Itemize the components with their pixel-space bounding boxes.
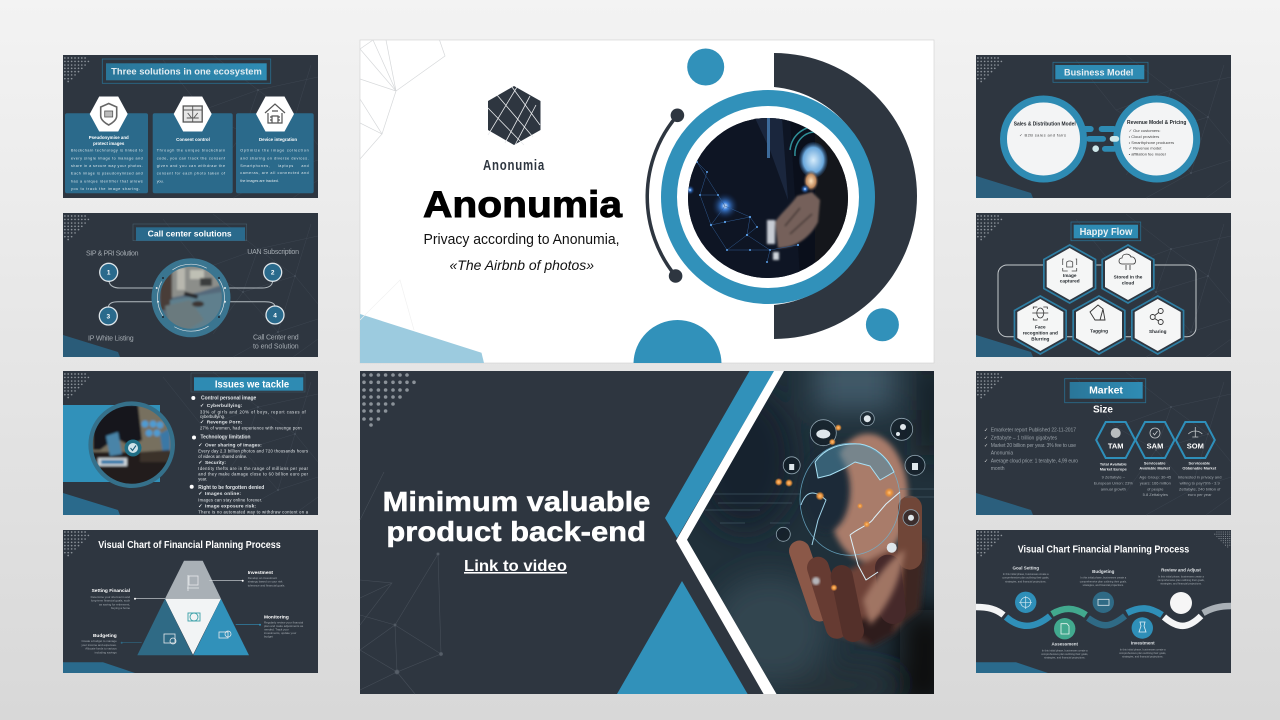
heading: three solutions <box>102 59 271 83</box>
text: card one body: Blockchain technology is linked to <box>71 149 143 153</box>
node: revenue model: ✓ Revenue model: <box>1129 145 1162 150</box>
text: card two body: Through the unique blockchain <box>157 149 225 153</box>
text: TAM description: Total Available <box>1100 461 1128 466</box>
title: minimum valuable product: Minimum valuable <box>383 486 650 517</box>
title: minimum valuable product <box>383 486 650 547</box>
text: issue list: and they make damage close to 60 billion euro per <box>198 471 309 476</box>
text: issue list: Right to be forgotten denied <box>198 485 264 491</box>
text: SAM description: Available Market <box>1139 465 1171 470</box>
decoration: blue triangle <box>617 581 748 694</box>
hexagon: tagging: Tagging <box>1090 329 1108 334</box>
decoration: network lines <box>360 472 443 694</box>
text: issue list <box>190 396 309 515</box>
text: market facts: ✓ <box>984 458 988 464</box>
text: SOM description: willing to pay79% - 3.9 <box>1180 480 1220 485</box>
panel: happy flow <box>976 213 1231 357</box>
number badges: 4 <box>273 312 277 319</box>
node: sales and distribution: ✓ B2B sales and fairs <box>1019 133 1066 138</box>
node: revenue model: Revenue Model & Pricing <box>1127 120 1186 126</box>
hexagon: stored in the cloud: cloud <box>1122 280 1134 285</box>
text: SOM description: Zettabyte, 240 billion of <box>1179 486 1221 491</box>
text: card two body: consent for each photo taken of <box>157 172 226 176</box>
connectors <box>108 281 275 307</box>
text: TAM description: European Union: 23% <box>1094 480 1133 485</box>
decoration: circles <box>634 48 899 363</box>
heading: issues <box>191 373 305 392</box>
hexagon: face recognition: recognition and <box>1023 330 1058 335</box>
text: issue list: ✓ <box>198 442 202 448</box>
heading: business model: Business Model <box>1064 68 1133 78</box>
node: revenue model: • Cloud providers <box>1129 134 1159 139</box>
node: revenue model: ✓ Our customers: <box>1129 128 1161 133</box>
text: card two body <box>157 149 226 183</box>
card: pseudonymise <box>65 96 148 193</box>
text: market facts: ✓ <box>984 435 988 441</box>
title: Visual Chart of Financial Planning Process <box>98 540 281 551</box>
heading: issues: Issues we tackle <box>215 380 290 390</box>
step: assessment: In this initial phase, businesses create a <box>1042 648 1088 652</box>
callout: budgeting: Budgeting <box>93 633 117 639</box>
hexagon: image captured: captured <box>1060 279 1080 284</box>
card: consent control: Consent control <box>176 137 210 142</box>
hexagon: sharing: Sharing <box>1149 329 1167 334</box>
text: SAM description: 5.8 Zettabytes <box>1143 492 1168 497</box>
text: issue list: ✓ <box>200 403 204 409</box>
panel: visual chart of financial planning <box>63 530 318 673</box>
labels <box>86 249 299 350</box>
text: issue list: There is no automated way to withdraw content on a <box>198 510 309 515</box>
icon: device house <box>256 96 294 132</box>
icon: consent grid <box>174 96 212 132</box>
hexagon: face recognition: Face <box>1035 325 1046 330</box>
step: budgeting: strategies, and financial projections. <box>1083 583 1124 587</box>
decoration: blue chevron bar <box>665 371 774 538</box>
callout: budgeting <box>81 633 142 654</box>
text: TAM description: Market Europe <box>1100 467 1128 472</box>
node: sales and distribution <box>1004 99 1084 179</box>
panel: title slide Anonumia <box>360 40 934 364</box>
text: card one body: share in a secure way your photos. <box>71 164 143 168</box>
callout: setting financial: Determine your short-term and <box>91 595 130 599</box>
heading: market <box>1065 379 1146 403</box>
hexagon: TAM <box>1096 422 1135 458</box>
step: assessment: Assessment <box>1051 642 1078 647</box>
step: review and adjust <box>1157 568 1205 614</box>
text: card three body: cameras, are all connected and <box>240 171 309 175</box>
icon: shield hexagon <box>90 96 128 132</box>
step: investment: Investment <box>1131 641 1155 646</box>
panel: three solutions <box>63 55 318 198</box>
text: SAM description: of people <box>1147 486 1164 491</box>
panel: call center solutions <box>63 213 318 357</box>
heading: call center <box>133 224 247 241</box>
text: SOM description: Interested in privacy and <box>1178 475 1221 480</box>
decoration: white chevron <box>676 371 784 694</box>
heading: three solutions: Three solutions in one ecosystem <box>111 67 262 78</box>
node: revenue model: • affiliation fee model <box>1129 151 1166 156</box>
text: issue list: year. <box>198 477 207 482</box>
step: assessment: comprehensive plan outlining their goals, <box>1041 652 1088 656</box>
number badges: 2 <box>271 270 275 277</box>
callout: budgeting: your income and expenses. <box>81 643 117 647</box>
text: card three body: the images are tracked. <box>240 179 279 183</box>
text: card three body <box>240 149 309 183</box>
text: SAM description: Age Group: 30-45 <box>1139 475 1172 480</box>
text: issue list: cyberbullying. <box>200 414 225 419</box>
text: card two body: given and you can withdraw the <box>157 164 225 168</box>
subtitle: Privacy according to Anonumia, <box>424 231 620 248</box>
heading: happy flow <box>1071 222 1141 241</box>
hexagon: tagging <box>1072 295 1126 355</box>
text: SAM description: Serviceable <box>1144 461 1166 466</box>
photo: hand holding globe <box>687 371 934 694</box>
text: issue list: ✓ <box>200 420 204 426</box>
callout: setting financial: as saving for retirement, <box>99 602 130 606</box>
text: issue list: Images can stay online forever. <box>198 497 262 502</box>
heading: market: Market <box>1089 385 1123 397</box>
text: issue list: ✓ <box>198 460 202 466</box>
title: minimum valuable product: product back-end <box>386 516 646 547</box>
callout: budgeting: Create a budget to manage <box>81 639 117 643</box>
step: budgeting: Budgeting <box>1092 569 1115 574</box>
decoration: blue ring <box>669 98 867 296</box>
number badges: 1 <box>107 270 111 277</box>
number badges <box>99 263 284 325</box>
text: TAM description: annual growth <box>1101 486 1126 491</box>
callout: monitoring: plan and make adjustments as <box>264 624 304 628</box>
heading: business model <box>1053 62 1148 82</box>
step: goal setting: In this initial phase, businesses create a <box>1003 572 1049 576</box>
text: market facts <box>984 427 1078 472</box>
callout: monitoring: needed. Track your <box>264 627 289 631</box>
step: goal setting: Goal Setting <box>1012 565 1039 570</box>
text: card one body: every single image to manage and <box>71 156 143 160</box>
callout: setting financial: long-term financial goals, such <box>91 599 130 603</box>
text: issue list: Image exposure risk: <box>205 503 256 509</box>
text: issue list: Security: <box>205 460 226 466</box>
text: market facts: Average cloud price: 1 terabyte, 4,99 euro <box>991 458 1078 464</box>
text: market facts: Zettabyte – 1 trillion gigabytes <box>991 435 1058 441</box>
callout: investment: Investment <box>248 570 273 576</box>
text: issue list: ✓ <box>198 503 202 509</box>
text: issue list: Every day 2.3 billion photos and 720 thousands hours <box>198 448 308 453</box>
hexagon: SAM <box>1136 422 1174 458</box>
card: device integration <box>236 96 314 193</box>
hexagon: SOM: SOM <box>1187 441 1204 450</box>
logo: hexagon <box>488 86 540 145</box>
text: issue list: Technology limitation <box>200 435 250 441</box>
step: investment <box>1119 617 1166 659</box>
hexagon: SOM <box>1176 422 1215 458</box>
text: issue list: Identity thefts are in the range of millions per year <box>198 466 309 471</box>
node: revenue model <box>1117 99 1197 179</box>
card: consent control <box>153 96 233 193</box>
callout: monitoring: investments, update your <box>264 631 296 635</box>
callout: monitoring: Monitoring <box>264 614 289 620</box>
hexagon: stored in the cloud: Stored in the <box>1114 274 1143 279</box>
hexagon: SAM: SAM <box>1147 441 1163 450</box>
text: issue list: ✓ <box>198 491 202 497</box>
hexagon: face recognition: Blurring <box>1031 336 1050 341</box>
text: market facts: Anonumia <box>991 451 1013 457</box>
step: assessment <box>1041 618 1088 660</box>
callout: investment: strategy based on your risk <box>248 580 283 584</box>
step: budgeting: comprehensive plan outlining their goals, <box>1080 579 1127 583</box>
number badges: 3 <box>106 313 110 320</box>
hexagon: TAM: TAM <box>1108 441 1124 450</box>
step: investment: strategies, and financial projections. <box>1122 655 1164 659</box>
text: card two body: you. <box>157 179 164 183</box>
photo circle: tablet <box>88 401 175 488</box>
callout: budgeting: Allocate funds to various <box>85 647 117 651</box>
text: card one body: has a unique identifier that allows <box>71 179 143 183</box>
subheading: size: Size <box>1093 405 1113 416</box>
photo circle: office <box>152 258 230 337</box>
callout: budgeting: including savings <box>95 650 117 654</box>
step: budgeting <box>1080 569 1127 613</box>
text: SAM description <box>1139 461 1172 497</box>
text: issue list: Revenge Porn: <box>207 420 243 426</box>
text: issue list: Images online: <box>205 491 241 497</box>
hexagon: sharing <box>1131 295 1184 355</box>
text: TAM description: 9 Zettabyte – <box>1102 475 1126 480</box>
labels: IP White Listing <box>88 336 134 343</box>
hexagon: face recognition <box>1014 295 1067 355</box>
text: market facts: ✓ <box>984 427 988 433</box>
text: card three body: and sharing on diverse devices. <box>240 156 309 160</box>
photo: businessman with light bulb <box>685 118 848 278</box>
logo wordmark: Anonumia <box>483 158 545 174</box>
panel: market size <box>976 371 1231 515</box>
text: market facts: ✓ <box>984 443 988 449</box>
title: Visual Chart Financial Planning Process <box>1018 545 1189 556</box>
card: device integration: Device integration <box>259 137 297 142</box>
step: goal setting: strategies, and financial projections. <box>1005 579 1047 583</box>
text: card one body: you to track the image sharing. <box>71 187 140 191</box>
step: budgeting: In this initial phase, businesses create a <box>1080 576 1127 580</box>
callout: investment <box>209 570 285 588</box>
step: goal setting <box>1002 565 1049 613</box>
callout: investment: Develop an investment <box>248 576 277 580</box>
hexagon: stored in the cloud <box>1101 244 1155 304</box>
text: issue list: of videos an shared online. <box>198 454 247 459</box>
callout: investment: tolerance and financial goals. <box>248 584 285 588</box>
text: card two body: code, you can track the consent <box>157 156 225 160</box>
heading: happy flow: Happy Flow <box>1080 227 1133 238</box>
text: issue list: Over sharing of images: <box>205 442 262 448</box>
text: market facts: Market 20 billion per year. 3% fee to use <box>991 443 1076 449</box>
chart: triangle segments <box>137 561 249 655</box>
connectors: pills <box>1082 126 1119 152</box>
text: card three body: Optimize the image collection <box>240 149 309 153</box>
node: revenue model: • Smarthphone producers <box>1129 140 1174 145</box>
text: SOM description: Serviceable <box>1188 461 1211 466</box>
callout: monitoring: Regularly review your financial <box>264 620 304 624</box>
panel: financial planning wave <box>976 530 1231 673</box>
chart: wave ribbon <box>976 606 1231 626</box>
labels: to end Solution <box>253 343 299 350</box>
step: review and adjust: strategies, and financial projections. <box>1160 582 1202 586</box>
text: SOM description <box>1178 461 1221 497</box>
decoration: dark half ring <box>774 53 917 339</box>
step: assessment: strategies, and financial projections. <box>1044 656 1086 660</box>
text: SOM description: euro per year <box>1188 492 1212 497</box>
panel: business model <box>976 55 1231 198</box>
step: review and adjust: comprehensive plan outlining their goals, <box>1157 578 1205 582</box>
title: Anonumia: Anonumia <box>423 184 622 225</box>
hexagon: image captured: Image <box>1063 273 1077 278</box>
link to video: Link to video <box>464 558 567 575</box>
text: TAM description <box>1094 461 1133 491</box>
text: SAM description: years: 166 million <box>1140 480 1171 485</box>
callout: monitoring <box>236 614 304 639</box>
panel: issues we tackle <box>63 371 318 515</box>
hexagon: image captured <box>1043 244 1096 304</box>
panel: minimum valuable product <box>360 371 934 694</box>
step: investment: comprehensive plan outlining their goals, <box>1119 651 1166 655</box>
node: sales and distribution: Sales & Distribution Model <box>1014 122 1076 128</box>
text: SOM description: Obtainable Market <box>1182 466 1217 471</box>
card: pseudonymise: Pseudonymise and <box>89 135 129 140</box>
text: issue list: Cyberbullying: <box>207 403 243 409</box>
labels: SIP & PRI Solution <box>86 250 139 257</box>
text: card three body: Smartphones, laptops and <box>240 164 309 168</box>
callout: setting financial: Setting Financial <box>92 588 130 594</box>
text: card one body: Each image is pseudonymised and <box>71 172 143 176</box>
step: review and adjust: Review and Adjust <box>1161 568 1201 573</box>
callout: setting financial <box>91 588 165 610</box>
decoration: left arc with dots <box>647 108 684 283</box>
step: review and adjust: In this initial phase, businesses create a <box>1158 574 1204 578</box>
text: market facts: month <box>991 466 1005 472</box>
callout: setting financial: buying a home <box>111 606 130 610</box>
tagline: «The Airbnb of photos» <box>450 257 594 273</box>
labels: Call Center end <box>253 334 299 341</box>
text: issue list: Control personal image <box>201 396 256 402</box>
labels: UAN Subscription <box>247 249 299 256</box>
text: card one body <box>71 149 143 191</box>
card: pseudonymise: protect images <box>93 141 125 146</box>
text: issue list: 33% of girls and 20% of boys, report cases of <box>200 409 307 414</box>
text: issue list: 27% of women, had experience with revenge porn <box>200 425 302 430</box>
step: investment: In this initial phase, businesses create a <box>1120 647 1166 651</box>
text: market facts: Emarketer report Published 22-11-2017 <box>991 427 1076 433</box>
heading: call center: Call center solutions <box>148 230 232 239</box>
step: goal setting: comprehensive plan outlining their goals, <box>1002 576 1049 580</box>
flow frame <box>998 265 1196 337</box>
callout: monitoring: budget <box>264 635 273 639</box>
